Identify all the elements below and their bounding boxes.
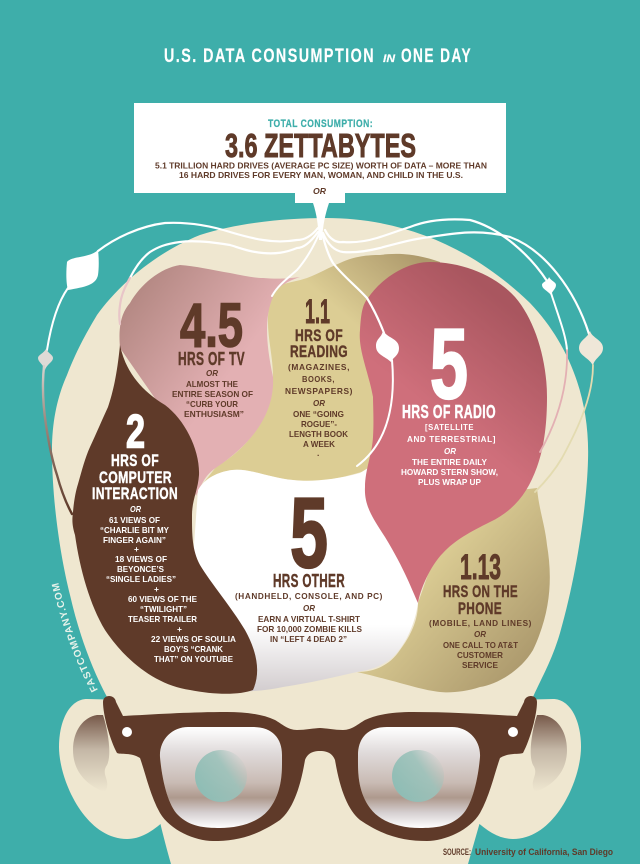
text: computer: INTERACTION	[92, 484, 178, 503]
text: phone: PHONE	[458, 599, 502, 618]
text: radio	[401, 308, 498, 487]
left lens	[160, 727, 282, 828]
right ear shading	[531, 715, 567, 792]
text: computer: 60 VIEWS OF THE	[128, 594, 197, 604]
total consumption label: TOTAL CONSUMPTION:	[268, 118, 373, 130]
right wire a	[325, 219, 547, 281]
text: tv: ENTHUSIASM”	[184, 409, 244, 419]
text: other: IN “LEFT 4 DEAD 2”	[270, 634, 347, 644]
fastcompany url: FASTCOMPANY.COM	[52, 583, 98, 692]
text: tv: 4.5	[180, 292, 243, 360]
text: computer: 22 VIEWS OF SOULIA	[151, 634, 236, 644]
text: radio: HRS OF RADIO	[402, 402, 496, 422]
left eye	[195, 750, 247, 802]
right cream node	[579, 331, 603, 366]
text: computer: 2	[126, 404, 145, 458]
wire to tv blob	[130, 232, 318, 278]
large left node	[66, 250, 99, 290]
text: computer: +	[134, 544, 139, 554]
text: tv: OR	[206, 368, 219, 378]
text: phone: SERVICE	[462, 660, 498, 670]
title: ONE DAY	[401, 45, 472, 67]
panel: radio blob	[360, 262, 547, 603]
glasses	[103, 696, 537, 841]
text: computer: BEYONCE’S	[117, 564, 164, 574]
text: phone: 1.13	[460, 548, 501, 587]
text: computer: “CHARLIE BIT MY	[100, 525, 169, 535]
total consumption box	[134, 103, 506, 203]
text: tv: HRS OF TV	[178, 349, 245, 369]
text: reading: READING	[290, 342, 348, 361]
text: radio: AND TERRESTRIAL]	[407, 434, 496, 444]
text: other: (HANDHELD, CONSOLE, AND PC)	[235, 591, 383, 601]
text: reading: .	[317, 448, 319, 458]
source: SOURCE:	[443, 847, 471, 857]
text: radio: HOWARD STERN SHOW,	[401, 467, 498, 477]
text: radio: THE ENTIRE DAILY	[412, 457, 487, 467]
text: computer: “TWILIGHT”	[140, 604, 187, 614]
text: reading: ROGUE”-	[301, 419, 337, 429]
panel: reading blob	[198, 254, 440, 490]
text: phone: ONE CALL TO AT&T	[443, 640, 519, 650]
radio node	[376, 330, 399, 362]
text: reading: LENGTH BOOK	[289, 429, 349, 439]
right ear	[475, 699, 581, 839]
text: other: EARN A VIRTUAL T-SHIRT	[258, 614, 361, 624]
text: reading	[285, 293, 353, 458]
headline number: 3.6 ZETTABYTES	[225, 127, 416, 164]
panel: other blob	[190, 468, 418, 692]
stem from box	[313, 203, 329, 240]
wire from radio node	[357, 360, 393, 466]
text: radio: PLUS WRAP UP	[418, 477, 481, 487]
text: computer: TEASER TRAILER	[128, 614, 197, 624]
text: radio: [SATELLITE	[425, 422, 474, 432]
text: reading: A WEEK	[303, 439, 336, 449]
text: reading: (MAGAZINES,	[288, 362, 350, 372]
wire to gray node	[47, 288, 68, 350]
right small node	[542, 277, 556, 295]
text: reading: OR	[313, 398, 326, 408]
text: other: HRS OTHER	[273, 571, 345, 591]
box description: 5.1 TRILLION HARD DRIVES (AVERAGE PC SIZE) WORTH OF DATA – MORE THAN	[155, 160, 487, 170]
left ear	[59, 699, 165, 839]
text: computer: THAT” ON YOUTUBE	[154, 654, 233, 664]
right wire b	[323, 232, 589, 334]
box description: 16 HARD DRIVES FOR EVERY MAN, WOMAN, AND CHILD IN THE U.S.	[179, 170, 463, 180]
text: tv: ALMOST THE	[186, 379, 238, 389]
text: computer: OR	[130, 504, 142, 514]
text: other: 5	[290, 477, 328, 588]
wire to reading blob	[272, 234, 319, 296]
text: computer: COMPUTER	[99, 468, 172, 487]
text: computer	[92, 404, 236, 664]
right eye	[392, 750, 444, 802]
left ear shading	[73, 715, 109, 792]
text: phone: HRS ON THE	[443, 582, 518, 601]
text: tv: ENTIRE SEASON OF	[172, 389, 253, 399]
text: computer: BOY’S “CRANK	[164, 644, 224, 654]
pink wire end	[119, 278, 130, 324]
text: phone: (MOBILE, LAND LINES)	[429, 618, 532, 628]
box description	[155, 160, 487, 180]
panel: phone blob	[357, 488, 550, 692]
frame	[103, 696, 537, 841]
right hinge	[508, 727, 518, 737]
text: phone: OR	[474, 629, 487, 639]
panel: computer blob	[72, 345, 257, 694]
text: phone	[429, 548, 532, 670]
wire to left node	[98, 223, 318, 251]
text: radio: 5	[430, 308, 468, 419]
left hinge	[122, 727, 132, 737]
text: other: OR	[303, 603, 316, 613]
text: tv: “CURB YOUR	[186, 399, 238, 409]
text: radio: OR	[444, 446, 457, 456]
text: computer: 61 VIEWS OF	[109, 515, 160, 525]
text: reading: BOOKS,	[302, 374, 335, 384]
text: computer: 18 VIEWS OF	[115, 554, 167, 564]
source: University of California, San Diego	[475, 847, 613, 858]
pink wire on head	[540, 350, 567, 452]
wire to radio node	[322, 233, 384, 333]
neuron wires	[38, 203, 603, 514]
right wire a continued	[551, 293, 567, 350]
text: phone: CUSTOMER	[457, 650, 503, 660]
gray node	[38, 349, 53, 370]
right lens	[358, 727, 480, 828]
text: reading: NEWSPAPERS)	[285, 386, 353, 396]
head	[52, 218, 588, 864]
text: other	[235, 477, 383, 644]
text: computer: +	[154, 584, 159, 594]
title: IN	[383, 53, 396, 65]
title: U.S. DATA CONSUMPTION	[164, 45, 375, 67]
text: computer: “SINGLE LADIES”	[106, 574, 176, 584]
text: computer: HRS OF	[111, 451, 159, 470]
panel: tv blob	[119, 265, 300, 496]
gold wire	[535, 365, 593, 492]
text: tv	[172, 292, 253, 419]
or: OR	[313, 186, 327, 196]
text: reading: 1.1	[305, 293, 330, 331]
gray to brown wire	[43, 366, 72, 514]
text: other: FOR 10,000 ZOMBIE KILLS	[257, 624, 362, 634]
text: reading: HRS OF	[295, 326, 343, 345]
text: computer: +	[177, 624, 182, 634]
text: computer: FINGER AGAIN”	[103, 535, 166, 545]
text: reading: ONE “GOING	[293, 409, 344, 419]
